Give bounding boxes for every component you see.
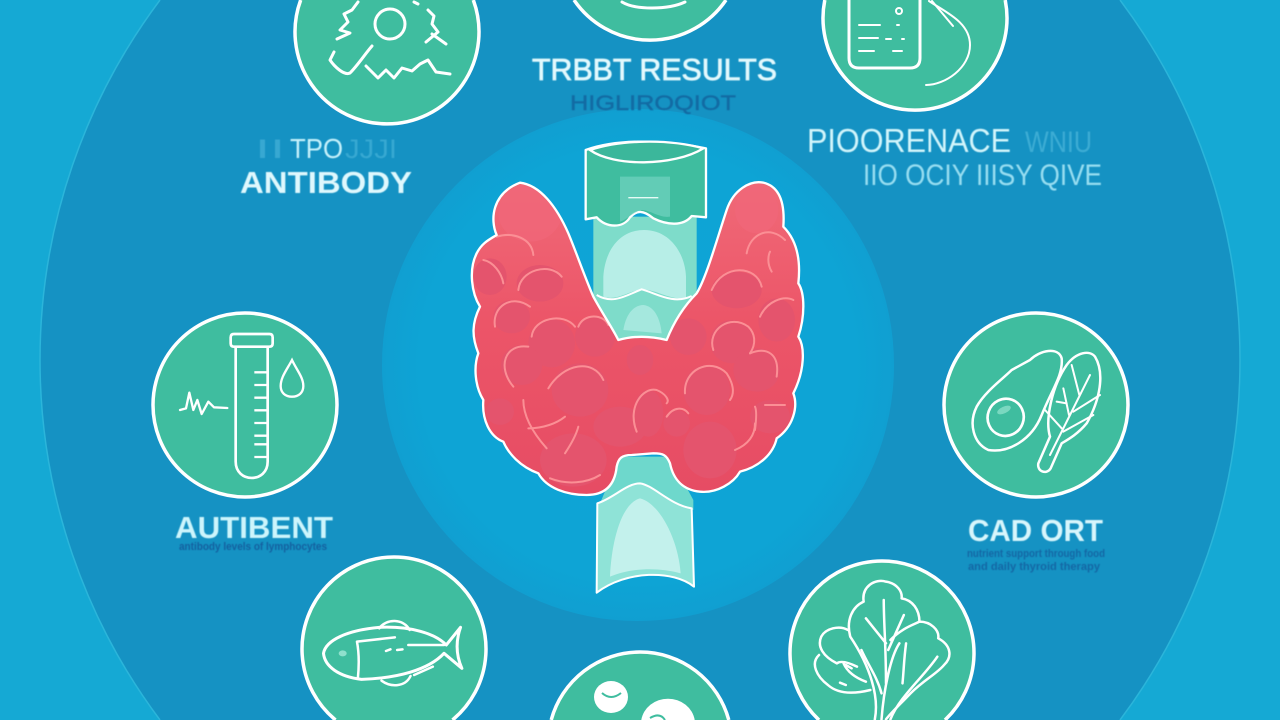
- heading: test results: TRBBT RESULTS: [532, 52, 777, 87]
- subheading: diet: and daily thyroid therapy: [968, 561, 1101, 573]
- heading: antibody: ANTIBODY: [240, 165, 412, 200]
- subheading: autoimmune: antibody levels of lymphocytes: [179, 541, 327, 553]
- inner circle: [382, 109, 894, 621]
- icon: lettuce: [790, 561, 974, 720]
- thyroid illustration: [472, 142, 803, 593]
- heading: intolerance: WNIU: [1025, 126, 1092, 159]
- icon: test tube: [153, 313, 337, 497]
- icon: test results: [574, 0, 726, 40]
- subheading: diet: [967, 548, 1105, 573]
- icon: selenium nuts: [551, 652, 729, 720]
- heading: intolerance: PIOORENACE: [807, 122, 1011, 159]
- subheading: diet: nutrient support through food: [967, 548, 1105, 560]
- icon: food intolerance: [823, 0, 1007, 110]
- icon: TPO antibody: [295, 0, 479, 124]
- icon: avocado and leaf: [944, 313, 1128, 497]
- heading: autoimmune: AUTIBENT: [175, 510, 333, 545]
- trachea top ring: [586, 142, 706, 226]
- thyroid gland lobes: [472, 182, 803, 495]
- subheading: test results: HIGLIROQIOT: [570, 92, 736, 115]
- heading: TPO: TPO: [290, 133, 343, 164]
- heading: TPO: JJJI: [345, 134, 397, 164]
- heading: diet: CAD ORT: [968, 513, 1103, 548]
- heading: TPO: II: [255, 134, 285, 164]
- trachea lower section: [597, 457, 694, 593]
- subheading: intolerance: IIO OCIY IIISY QIVE: [863, 159, 1102, 192]
- trachea upper section: [593, 217, 697, 343]
- heading: TPO: [255, 133, 397, 164]
- icon: fish: [302, 557, 486, 720]
